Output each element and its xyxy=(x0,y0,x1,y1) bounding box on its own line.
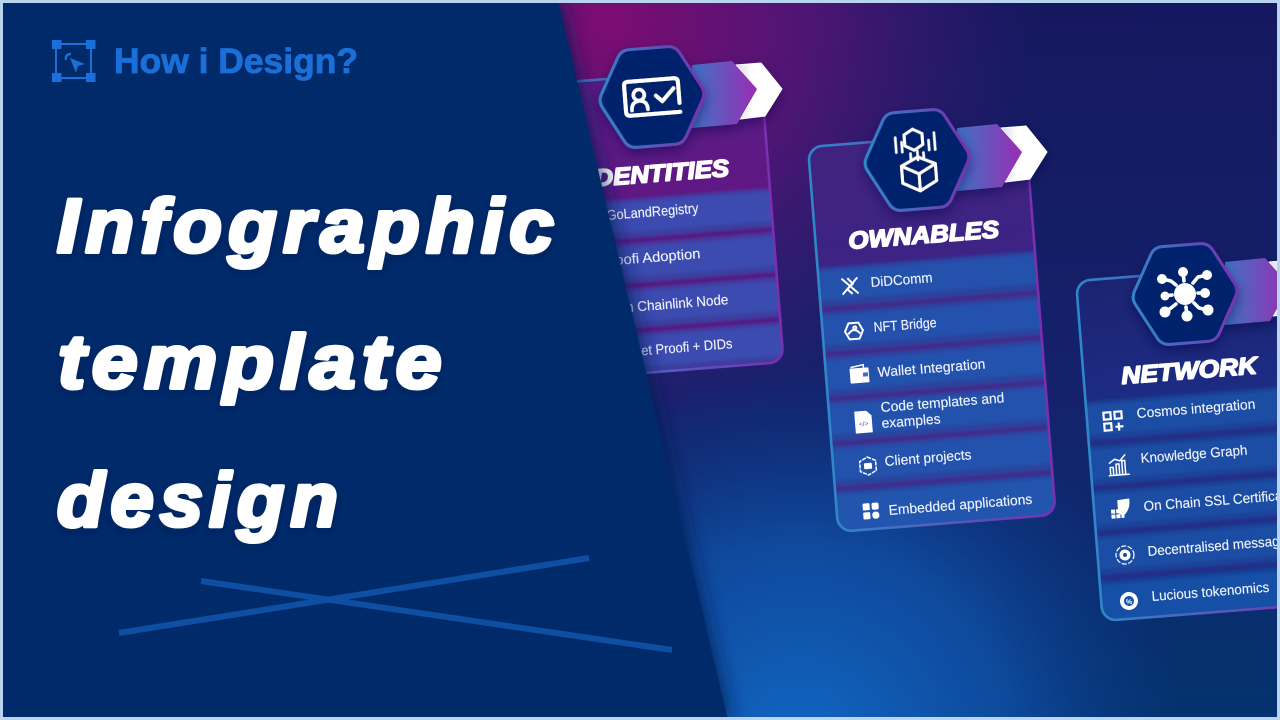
network list: Lucious tokenomics xyxy=(1151,579,1270,604)
network list: Knowledge Graph xyxy=(1140,442,1248,466)
network hexagon icon xyxy=(1129,241,1241,347)
ownables list: Embedded applications xyxy=(888,491,1033,518)
icon: didcomm xyxy=(841,277,859,295)
ownables title: OWNABLES xyxy=(847,216,1000,255)
main heading: Infographic xyxy=(57,184,560,269)
ownables list: DiDComm xyxy=(870,269,933,290)
network arrow chevrons xyxy=(1225,258,1280,325)
icon: lucious tokenomics: % xyxy=(1126,599,1133,606)
network list xyxy=(1103,396,1280,611)
logo xyxy=(52,40,358,82)
ownables list: Wallet Integration xyxy=(877,356,986,380)
panel: network card xyxy=(1072,241,1280,630)
ownables list: Code templates and xyxy=(880,389,1005,415)
ownables card body xyxy=(804,130,1060,541)
main heading xyxy=(57,184,560,543)
identities list: On Chainlink Node xyxy=(615,291,729,316)
icon: nft bridge xyxy=(844,322,864,340)
main heading: design xyxy=(57,458,344,543)
icon: decentralised messaging xyxy=(1115,545,1135,565)
identities arrow chevrons xyxy=(692,61,782,128)
ownables list: NFT Bridge xyxy=(873,314,937,335)
icon: code file xyxy=(854,410,873,434)
icon: embedded applications xyxy=(862,502,880,520)
identities hexagon icon xyxy=(596,44,708,150)
network title: NETWORK xyxy=(1120,352,1260,390)
ownables list: examples xyxy=(881,410,941,431)
icon: lucious tokenomics xyxy=(1119,591,1139,611)
icon: cosmos integration xyxy=(1103,411,1124,432)
identities title: IDENTITIES xyxy=(586,155,730,193)
panel: ownables card xyxy=(804,107,1060,541)
ownables list: Client projects xyxy=(884,446,972,469)
identities list: Set Proofi + DIDs xyxy=(632,335,733,359)
icon: on chain ssl xyxy=(1110,498,1131,519)
icon: knowledge graph xyxy=(1107,454,1130,476)
identities list: Proofi Adoption xyxy=(600,245,701,269)
logo wordmark: How i Design? xyxy=(114,42,358,81)
icon: client projects xyxy=(859,456,877,476)
left diagonal panel xyxy=(0,0,728,720)
identities list xyxy=(600,200,733,359)
identities card body xyxy=(577,78,784,374)
identities list: GoLandRegistry xyxy=(606,200,699,223)
icon: code file: </> xyxy=(859,421,869,428)
icon: wallet xyxy=(849,364,870,384)
network card body xyxy=(1072,264,1280,630)
ownables list xyxy=(841,269,1033,520)
main heading: template xyxy=(58,320,448,405)
network list: Cosmos integration xyxy=(1136,396,1256,421)
icon: design frame with cursor xyxy=(52,40,96,82)
ownables hexagon icon xyxy=(861,107,973,213)
crossed decorative lines xyxy=(119,558,672,650)
panel: identities card xyxy=(577,45,784,374)
ownables arrow chevrons xyxy=(957,124,1047,191)
